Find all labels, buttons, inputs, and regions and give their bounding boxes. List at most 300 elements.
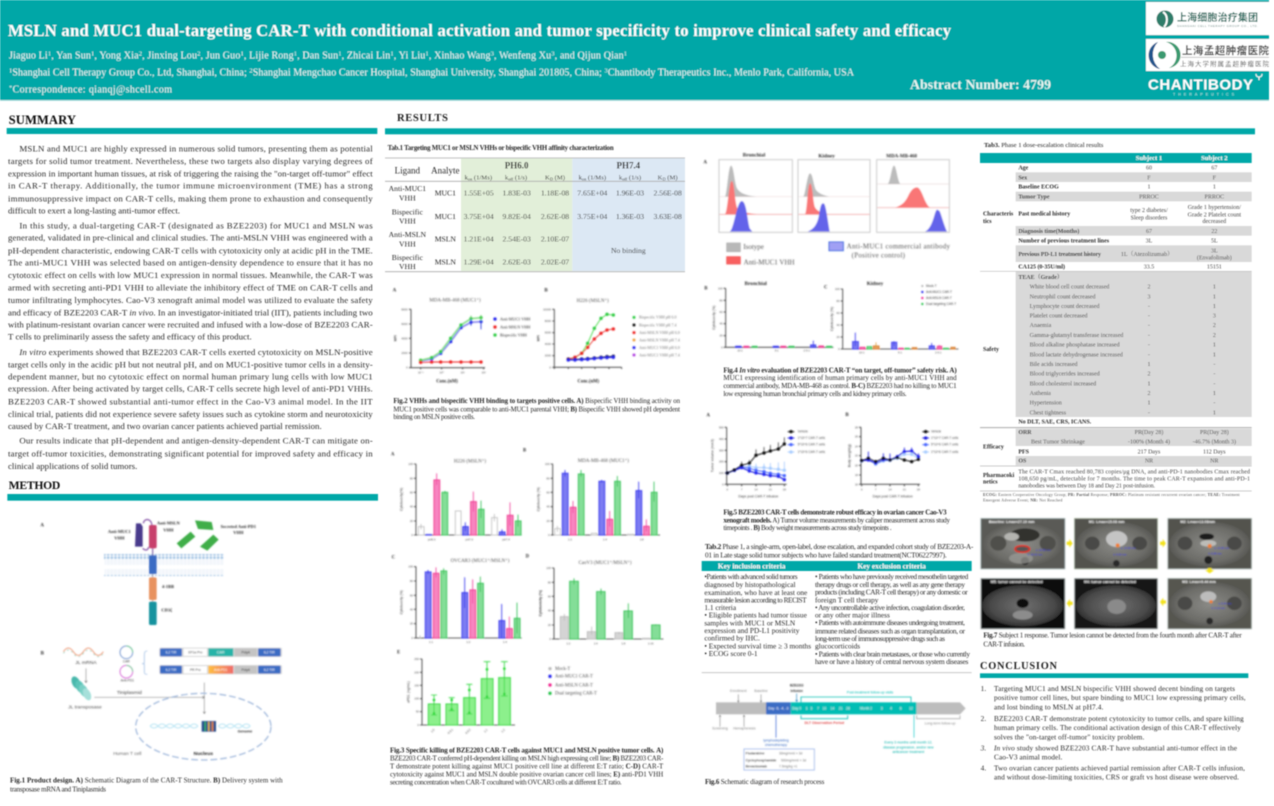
panel B body weight chart: 28 xyxy=(917,487,920,491)
panel A tumor volume chart: Tumor volume (mm3) xyxy=(711,439,715,472)
legend xyxy=(548,667,597,697)
panel C bar chart: Kidney xyxy=(867,281,884,287)
safety rows: Platelet count decreased xyxy=(1030,314,1087,320)
panel A bar chart: pH7.4 xyxy=(502,537,510,541)
figure 2 panel A line chart: 8000 xyxy=(401,307,408,311)
table 1 affinity: (M) xyxy=(666,174,678,181)
figure 2 caption: binding on MSLN positive cells. xyxy=(393,414,475,421)
table 2 caption xyxy=(705,542,974,559)
constructs: EF1a Pro xyxy=(188,651,203,655)
yellow arrows xyxy=(1067,539,1214,608)
panel B body weight chart: 0 xyxy=(861,487,863,491)
summary paragraph 4: Our results indicate that pH-dependent and antigen-density-dependent CAR-T can mitigate on- xyxy=(19,436,373,446)
characteristics rows: tics xyxy=(983,219,992,225)
legend: Anti-MUC1 VHH pH 6.0 xyxy=(639,345,680,350)
panel B body weight chart: 20 xyxy=(855,463,858,467)
legend: 1*10^6 CAR-T cells xyxy=(931,450,959,454)
figure 4 caption: MUC1 expressing identification of human primary cells by anti-MUC1 VHH and xyxy=(723,374,957,382)
inclusion criteria: •Patients with advanced solid tumors xyxy=(704,572,798,581)
table 1 affinity: 1.21E+04 xyxy=(464,235,494,244)
figure 2 panel A line chart: 6000 xyxy=(401,322,408,326)
results section xyxy=(385,113,1255,421)
summary paragraph 1: expression in important human tissues, at risk of triggering the raising the "on-target off-tumor" effect xyxy=(8,168,373,178)
characteristics rows: 67 xyxy=(1146,229,1152,235)
table 1 affinity: VHH xyxy=(399,239,416,248)
top annotations: infusion xyxy=(791,689,803,693)
logo: Chantibody: THERAPEUTICS xyxy=(1173,92,1235,96)
panel B bar chart: 40 xyxy=(720,322,723,326)
figure 2 panel A line chart: 10¹ xyxy=(461,371,465,375)
safety rows: 2 xyxy=(1147,285,1150,291)
table 1 affinity: 1.55E+05 xyxy=(464,189,494,198)
summary paragraph 2 xyxy=(8,221,373,342)
figure 4 safety xyxy=(703,153,958,398)
summary paragraph 1: difficult to exert a long-lasting anti-tumor effect. xyxy=(8,206,180,216)
figure 2 panel A line chart: 10⁻¹ xyxy=(418,371,424,375)
inclusion criteria: samples with MUC1 or MSLN xyxy=(704,618,796,627)
table 1 affinity: 2.10E-07 xyxy=(541,235,569,244)
table 1 affinity: MSLN xyxy=(435,235,456,244)
timeline bar: Day -5, -4, -3 xyxy=(768,706,789,710)
figure 1 panel B: delivery system: Human T cell xyxy=(113,751,141,757)
efficacy rows: 217 Days xyxy=(1138,449,1161,455)
conclusion list: Cao-V3 animal model. xyxy=(994,752,1062,761)
table 1 affinity: PH6.0 xyxy=(505,161,529,171)
top annotations: Enrollment xyxy=(730,689,747,693)
flow legend: (Positive control) xyxy=(852,251,906,259)
safety rows: Lymphocyte count decreased xyxy=(1030,304,1099,310)
efficacy rows: -46.7% (Month 3) xyxy=(1193,439,1236,446)
pharmacokinetics row: Pharmacoki xyxy=(983,473,1015,479)
panel E bar chart: 0.5:2 xyxy=(464,727,472,735)
panel B body weight chart: 26 xyxy=(855,435,858,439)
legend: Mock-T xyxy=(555,667,570,672)
panel B body weight chart: 18 xyxy=(855,473,858,477)
figure 1 panel A: CAR structure xyxy=(40,520,257,625)
conclusion list: BZE2203 CAR-T demonstrate potent cytotoxicity to tumor cells, and spare killing xyxy=(994,714,1244,723)
bottom annotations: 30mg/m²/d × 3d xyxy=(779,752,803,756)
panel C bar chart: 60 xyxy=(837,311,840,315)
table 2 caption: Tab.2 Phase 1, a single-arm, open-label, dose escalation, and expanded cohort study of BZE2203-A- xyxy=(705,542,974,551)
timeline bar: 14 xyxy=(830,706,834,710)
table 1 affinity: 2.02E-07 xyxy=(541,257,569,266)
characteristics rows: 3L xyxy=(1211,248,1218,254)
figure 3 caption xyxy=(390,747,664,787)
summary paragraph 2: In this study, a dual-targeting CAR-T (designated as BZE2203) for MUC1 and MSLN was xyxy=(19,221,373,231)
bottom annotations: chemotherapy xyxy=(765,743,787,747)
safety rows: - xyxy=(1213,401,1215,407)
MRI month 3: a: 9.44 mm xyxy=(1218,601,1232,605)
legend: Mock-T xyxy=(926,284,937,288)
bottom annotations: Bevacizumab xyxy=(746,764,767,768)
safety rows: 1 xyxy=(1213,294,1216,300)
panel D bar chart: 100 xyxy=(546,566,551,570)
figure 7 MRI images xyxy=(981,518,1252,629)
panel A bar chart: pH7.0 xyxy=(466,537,474,541)
conclusion list: 4. xyxy=(981,764,986,773)
legend xyxy=(632,315,680,357)
MRI month 1: a: 15.08 mm xyxy=(1121,546,1137,550)
heading: conclusion: CONCLUSION xyxy=(980,661,1058,672)
panel D bar chart: D xyxy=(526,555,530,560)
table 1 affinity: 1.83E-03 xyxy=(503,189,531,198)
table 3 phase 1 results: Tab3. Phase 1 dose-escalation clinical results xyxy=(984,142,1104,149)
table 2 caption: 01 in Late stage solid tumor subjects who have failed standard treatment(NCT06227997). xyxy=(705,550,947,559)
panel B body weight chart: 14 xyxy=(888,487,892,491)
logo: Shanghai Mengchao Cancer Hospital: 上海孟超肿瘤医院 xyxy=(1182,44,1270,57)
characteristics rows: 5L xyxy=(1211,239,1218,245)
summary paragraph 3: BZE2203 CAR-T showed substantial anti-tumor effect in the Cao-V3 animal model. In the IIT xyxy=(8,396,373,406)
panel D bar chart: 60 xyxy=(548,594,551,598)
efficacy rows: 112 Days xyxy=(1203,449,1226,455)
panel C bar chart: 40 xyxy=(837,323,840,327)
logo: Shanghai Cell Therapy Group: SHANGHAI CELL THERAPY GROUP CO., LTD. xyxy=(1177,24,1258,28)
flow legend: Isotype xyxy=(743,243,764,251)
safety rows: Neutrophil count decreased xyxy=(1030,294,1095,300)
panel D bar chart: 1:8 xyxy=(621,641,626,645)
panel D bar chart: 0 xyxy=(549,637,551,641)
panel B bar chart: 60 xyxy=(547,490,550,494)
panel B body weight chart: 24 xyxy=(855,444,858,448)
figure 2 panel A line chart: MFI xyxy=(393,335,397,341)
characteristics rows: (Envafolimab) xyxy=(1197,255,1232,262)
safety rows: 3 xyxy=(1213,314,1216,320)
table 1 affinity: Bispecific xyxy=(392,253,423,262)
safety rows: - xyxy=(1213,372,1215,378)
safety rows: 2 xyxy=(1147,372,1150,378)
figure 2 panel B line chart: 0 xyxy=(549,365,551,369)
table 1 affinity: Tab.1 Targeting MUC1 or MSLN VHHs or bispecific VHH affinity characterization xyxy=(388,145,614,152)
MRI month 3 xyxy=(1168,578,1252,629)
bottom annotations: Every 3 months until month 12, xyxy=(884,741,932,745)
table 1 affinity: (M) xyxy=(553,174,565,181)
summary paragraph 2: tumor infiltrating lymphocytes. Cao-V3 xenograft animal model was utilized to evaluate the safety xyxy=(8,295,373,305)
legend xyxy=(788,430,825,454)
panel B bar chart: 1:2 xyxy=(568,537,572,541)
figure 1 panel B: delivery system: B xyxy=(41,652,45,657)
characteristics rows: Sleep disorders xyxy=(1131,215,1168,221)
panel A tumor volume chart: 0 xyxy=(722,482,724,486)
safety rows: Blood cholesterol increased xyxy=(1030,381,1096,387)
bottom annotations: Long-term follow-up xyxy=(925,722,955,726)
panel B bar chart: B xyxy=(523,448,526,453)
table 1 affinity: 2.56E-08 xyxy=(654,189,682,198)
panel B bar chart xyxy=(704,281,833,353)
authors: Jiaguo Li1, Yan Sun1, Yong Xia2, Jinxing Lou2, Jun Guo1, Lijie Rong1, Dan Sun1, Zhicai Lin1, Yi Liu1, Xinhao Wang3, Wenfeng Xu3, and Qijun Qian1 xyxy=(9,50,627,62)
panel C bar chart: 100 xyxy=(835,287,840,291)
table 2 criteria: Key inclusion criteria xyxy=(718,562,786,571)
legend: 1*10^6 CAR-T cells xyxy=(798,450,825,454)
pharmacokinetics row xyxy=(983,469,1250,490)
figure 2 panel B line chart: 2000 xyxy=(545,354,551,358)
efficacy rows: OS xyxy=(1018,459,1027,465)
panel A tumor volume chart: A xyxy=(706,413,710,418)
safety rows: 1 xyxy=(1147,401,1150,407)
panel A bar chart: 40 xyxy=(410,505,413,509)
figure 2 panel A line chart: 0 xyxy=(406,366,408,370)
table footnote xyxy=(983,492,1241,502)
characteristics rows: 1 xyxy=(1213,185,1216,191)
characteristics rows: PRROC xyxy=(1205,195,1224,201)
panel B body weight chart: 21 xyxy=(903,487,906,491)
characteristics rows: Number of previous treatment lines xyxy=(1018,239,1110,245)
bottom annotations: Fludarabine xyxy=(746,752,765,756)
panel B body weight chart: 7 xyxy=(875,487,877,491)
figure 5 and table 2 and figure 6 xyxy=(702,413,974,786)
panel A tumor volume chart: Days post CAR-T infusion xyxy=(738,495,778,499)
panel C bar chart: 20 xyxy=(837,335,840,339)
legend: Vehicle xyxy=(798,430,808,434)
characteristics rows: 67 xyxy=(1211,166,1217,172)
plasmids xyxy=(120,646,147,683)
summary paragraph 1 xyxy=(8,143,373,216)
panel C bar chart: Cytotoxicity (%) xyxy=(400,590,404,614)
panel C bar chart: 1:1 xyxy=(429,640,433,644)
logo: Chantibody: CHANTIBODY xyxy=(1148,76,1253,94)
characteristics rows: 22 xyxy=(1211,229,1217,235)
top annotations: Baseline xyxy=(754,689,768,693)
panel E bar chart: 1:1 xyxy=(483,728,489,733)
conclusion section xyxy=(980,661,1248,782)
safety rows: - xyxy=(1148,304,1150,310)
constructs: Anti-PD1 xyxy=(214,668,227,672)
figure 2 panel B line chart: 8000 xyxy=(545,319,551,323)
panel E bar chart xyxy=(397,651,515,735)
bottom annotations: anticancer treatment xyxy=(892,750,924,754)
figure 7 caption: CAR-T infusion. xyxy=(983,640,1025,648)
summary paragraph 4: target off-tumor toxicities, demonstrating significant potential for improved safety and efficacy in xyxy=(8,448,373,458)
panel A tumor volume chart: 21 xyxy=(769,487,772,491)
legend: Bispecific VHH pH 6.0 xyxy=(639,315,677,320)
constructs: IL2 TIR xyxy=(264,668,275,672)
panel A tumor volume chart: 28 xyxy=(783,487,786,491)
panel E bar chart: 1:8 xyxy=(430,728,436,733)
summary section xyxy=(7,113,377,471)
timeline bar: 3 xyxy=(881,706,883,710)
panel A bar chart xyxy=(391,452,522,541)
panel C bar chart: OVCAR3 (MUC1⁺/MSLN⁺) xyxy=(451,558,510,564)
table 3 phase 1 results: Subject 2 xyxy=(1201,155,1228,162)
panel B bar chart: 0 xyxy=(721,345,723,349)
table 1 affinity: No binding xyxy=(611,246,646,255)
logo: Shanghai Mengchao Cancer Hospital: 上海大学附属孟超肿瘤医院 xyxy=(1180,59,1270,68)
panel C bar chart: 0 xyxy=(411,636,413,640)
legend: Anti-MSLN CAR-T xyxy=(926,296,952,300)
figure 1 panel A: CAR structure: VHH xyxy=(233,530,244,535)
timeline bar: 12 xyxy=(909,706,913,710)
table 1 affinity: MUC1 xyxy=(435,189,456,198)
table 1 affinity: (1/Ms) xyxy=(586,174,606,181)
correspondence: *Correspondence: qianqj@shcell.com xyxy=(9,84,172,96)
conclusion list: positive tumor cell lines, but spare binding to MUC1 low expressing primary cells, xyxy=(994,693,1246,702)
panel A flow histograms: A xyxy=(703,161,707,166)
inclusion criteria: • ECOG score 0-1 xyxy=(704,649,758,658)
MRI month 3: b: 6.12 mm xyxy=(1212,606,1226,610)
safety rows: 1 xyxy=(1213,285,1216,291)
panel D bar chart xyxy=(526,555,663,645)
constructs xyxy=(159,648,282,674)
figure 1 panel A: CAR structure: VHH xyxy=(163,527,174,532)
safety rows: 1 xyxy=(1213,352,1216,358)
panel C bar chart: 60 xyxy=(410,593,413,597)
characteristics rows: Age xyxy=(1018,166,1029,172)
figure 2 panel A line chart: 10² xyxy=(482,371,486,375)
figure 5 caption: Fig.5 BZE2203 CAR-T cells demonstrate robust efficacy in ovarian cancer Cao-V3 xyxy=(723,509,947,517)
characteristics rows: type 2 diabetes/ xyxy=(1130,208,1168,214)
conclusion list: human primary cells. The conditional activation design of this CAR-T effectively xyxy=(994,723,1241,732)
characteristics rows: F xyxy=(1147,175,1151,181)
safety rows: Anaemia xyxy=(1030,323,1052,329)
figure 1 panel B: delivery system: Nucleus xyxy=(194,751,213,757)
exclusion criteria: • Any uncontrollable active infection, coagulation disorder, xyxy=(815,603,965,612)
panel D bar chart: Cytotoxicity (%) xyxy=(539,590,543,617)
table 1 affinity: MSLN xyxy=(435,257,456,266)
flow legend: Anti-MUC1 VHH xyxy=(744,258,795,266)
figure 1 panel B: delivery system xyxy=(41,646,282,760)
figure 2 panel B line chart: 6000 xyxy=(545,331,551,335)
histogram: MDA-MB-468 xyxy=(877,160,949,232)
conclusion list: 1. xyxy=(981,684,986,693)
figure 3 caption: BZE2203 CAR-T conferred pH-dependent killing on MSLN high expressing cell line; B) BZE2203 CAR- xyxy=(390,755,664,763)
efficacy rows: PR(Day 28) xyxy=(1200,429,1229,436)
heading: method: METHOD xyxy=(9,479,60,492)
panel E bar chart: 0 xyxy=(417,723,419,727)
top annotations: BZE2203 xyxy=(790,684,804,688)
bottom annotations: DLT Observation Period xyxy=(805,721,844,725)
characteristics rows: decreased xyxy=(1203,219,1226,225)
summary paragraph 3: In vitro experiments showed that BZE2203 CAR-T cells exerted cytotoxicity on MSLN-positive xyxy=(18,347,373,357)
panel A flow histograms: MDA-MB-468 xyxy=(886,155,918,160)
exclusion criteria: or any other major illness xyxy=(815,611,890,620)
exclusion criteria: have or have a history of central nervous system diseases xyxy=(815,657,968,666)
table 1 affinity: on xyxy=(582,176,587,181)
summary paragraph 2: cytotoxic effect on cells with low MUC1 expression in normal tissues. Meanwhile, the CAR-T was xyxy=(8,270,373,280)
nucleus xyxy=(136,693,271,760)
figure 3 caption: T demonstrate potent killing against MUC1 positive cell line at different E:T ratio; C-D) CAR-T xyxy=(390,763,664,771)
MRI baseline: Baseline: Lmax=27.19 mm xyxy=(989,520,1035,524)
panel B bar chart: Bronchial xyxy=(744,281,767,287)
characteristics rows xyxy=(983,166,1241,271)
panel C bar chart: 0 xyxy=(838,347,840,351)
table 1 affinity: 2.54E-03 xyxy=(503,235,531,244)
panel C bar chart: 1:4 xyxy=(503,640,507,644)
panel E bar chart: 150 xyxy=(414,683,419,687)
figure 5 caption: timepoints . B) Body weight measurements across study timepoints . xyxy=(723,524,892,532)
efficacy rows: Efficacy xyxy=(983,444,1004,450)
legend: Anti-MSLN VHH xyxy=(500,324,530,329)
JL mRNA: JL mRNA xyxy=(75,660,97,666)
characteristics rows: 60 xyxy=(1146,166,1152,172)
abstract number: Abstract Number: 4799 xyxy=(910,77,1051,92)
inclusion criteria: • Expected survival time ≥ 3 months xyxy=(704,641,811,650)
conclusion list: Targeting MUC1 and MSLN bispecific VHH showed decent binding on targets xyxy=(994,684,1235,693)
pharmacokinetics row: nanobodies was between Day 18 and Day 21 post-infusion. xyxy=(1018,483,1155,490)
legend: Anti-MUC1 VHH xyxy=(500,316,530,321)
conclusion list: Two ovarian cancer patients achieved partial remission after CAR-T cells infusion, xyxy=(994,764,1245,773)
panel A tumor volume chart: 300 xyxy=(719,448,724,452)
characteristics rows: Characteris xyxy=(983,212,1014,218)
panel C bar chart: 5:1 xyxy=(898,351,902,355)
characteristics rows: Sex xyxy=(1018,175,1027,181)
constructs: PR Pro xyxy=(190,668,201,672)
plasmids: Anti-PD1 xyxy=(121,679,134,683)
pharmacokinetics row: The CAR-T Cmax reached 80,783 copies/μg DNA, and anti-PD-1 nanobodies Cmax reached xyxy=(1018,469,1250,475)
summary paragraph 2: and efficacy of BZE2203 CAR-T in vivo. In an investigator-initiated trial (IIT), patients including two xyxy=(8,307,373,317)
safety rows: Hypertension xyxy=(1030,401,1062,407)
exclusion criteria: glucocorticoids xyxy=(815,642,860,651)
figure 2 panel A line chart: 2000 xyxy=(401,351,408,355)
safety rows: - xyxy=(1148,314,1150,320)
figure 2 panel B line chart: 10000 xyxy=(543,307,551,311)
table 1 affinity: 3.63E-08 xyxy=(654,212,682,221)
safety rows: Blood triglycerides increased xyxy=(1030,372,1100,378)
table 1 affinity: 3.75E+04 xyxy=(577,212,608,221)
table 1 affinity: (1/s) xyxy=(627,174,641,181)
panel C bar chart: 40 xyxy=(410,607,413,611)
conclusion list: and without dose-limiting toxicities, CRS or graft vs host disease were observed. xyxy=(994,773,1239,782)
legend: Vehicle xyxy=(931,430,941,434)
panel A flow histograms: Bronchial xyxy=(743,153,766,159)
figure 2 panel A line chart: MDA-MB-468 (MUC1⁺) xyxy=(429,297,481,303)
safety rows: 1 xyxy=(1147,381,1150,387)
bottom annotations: 7.5mg/kg ×1 xyxy=(779,764,798,768)
legend: Anti-MSLN VHH pH 7.4 xyxy=(639,337,680,342)
summary paragraph 1: in CAR-T therapy. Additionally, the tumor immune microenvironment (TME) has a strong xyxy=(8,181,373,191)
constructs: IL2 TIR xyxy=(166,651,177,655)
MRI month 3: M3: Lmax=9.44 mm xyxy=(1182,580,1217,584)
summary paragraph 2: with platinum-resistant ovarian cancer were recruited and infused with a low-dose of BZE2203 CAR- xyxy=(8,320,373,330)
inclusion criteria: • Eligible patients had tumor tissue xyxy=(704,611,807,620)
figure 2 panel B line chart: 4000 xyxy=(545,342,551,346)
panel D bar chart: 1:16 xyxy=(648,641,654,645)
summary paragraph 2: The anti-MUC1 VHH was selected based on antigen-density dependence to ensure that it has no xyxy=(8,258,373,268)
logo: Shanghai Cell Therapy Group: 上海细胞治疗集团 xyxy=(1177,11,1258,24)
panel A tumor volume chart: 14 xyxy=(754,487,758,491)
header banner xyxy=(0,0,1270,101)
inclusion criteria: examination, who have at least one xyxy=(704,588,807,597)
table 1 affinity: Anti-MSLN xyxy=(389,230,427,239)
MRI month 1: b: 8.60 mm xyxy=(1113,553,1127,557)
MRI baseline: a: 26.58 mm xyxy=(1036,548,1052,552)
panel B bar chart: Cytotoxicity (%) xyxy=(712,306,716,330)
characteristics rows: Grade 1 hypertension/ xyxy=(1188,205,1241,211)
bottom annotations: Hemapheresis xyxy=(733,727,756,731)
efficacy rows: -100% (Month 4) xyxy=(1128,439,1170,446)
characteristics rows: 15151 xyxy=(1207,265,1222,271)
table 1 affinity xyxy=(385,145,685,272)
figure 2 panel B line chart: H226 (MSLN⁺) xyxy=(577,298,609,304)
panel E bar chart: 200 xyxy=(414,670,419,674)
table 1 affinity: PH7.4 xyxy=(616,161,641,171)
panel A bar chart: A xyxy=(391,452,395,457)
summary paragraph 4 xyxy=(8,436,373,471)
JL transposase: JL transposase xyxy=(68,705,102,711)
table 1 affinity: Ligand xyxy=(395,165,421,175)
table 1 affinity: K xyxy=(658,174,662,181)
panel A flow histograms xyxy=(703,153,950,266)
conclusion list xyxy=(980,684,1246,782)
characteristics rows: F xyxy=(1213,175,1217,181)
figure 1 panel A: CAR structure: 4-1BB xyxy=(162,584,174,589)
genome: Genome xyxy=(238,729,252,733)
panel C bar chart: C xyxy=(824,285,828,290)
table 1 affinity: VHH xyxy=(399,193,416,202)
summary paragraph 3: clinical trial, patients did not experience severe safety issues such as cytokine storm and neurotoxicity xyxy=(8,409,373,419)
figure 6 schematic xyxy=(712,684,966,770)
summary paragraph 1: immunosuppressive impact on CAR-T cells, making them prone to exhaustion and consequently xyxy=(8,193,373,203)
figure 1 panel A: CAR structure: Secreted Anti-PD1 xyxy=(221,524,257,529)
figure 7 caption xyxy=(983,631,1242,648)
